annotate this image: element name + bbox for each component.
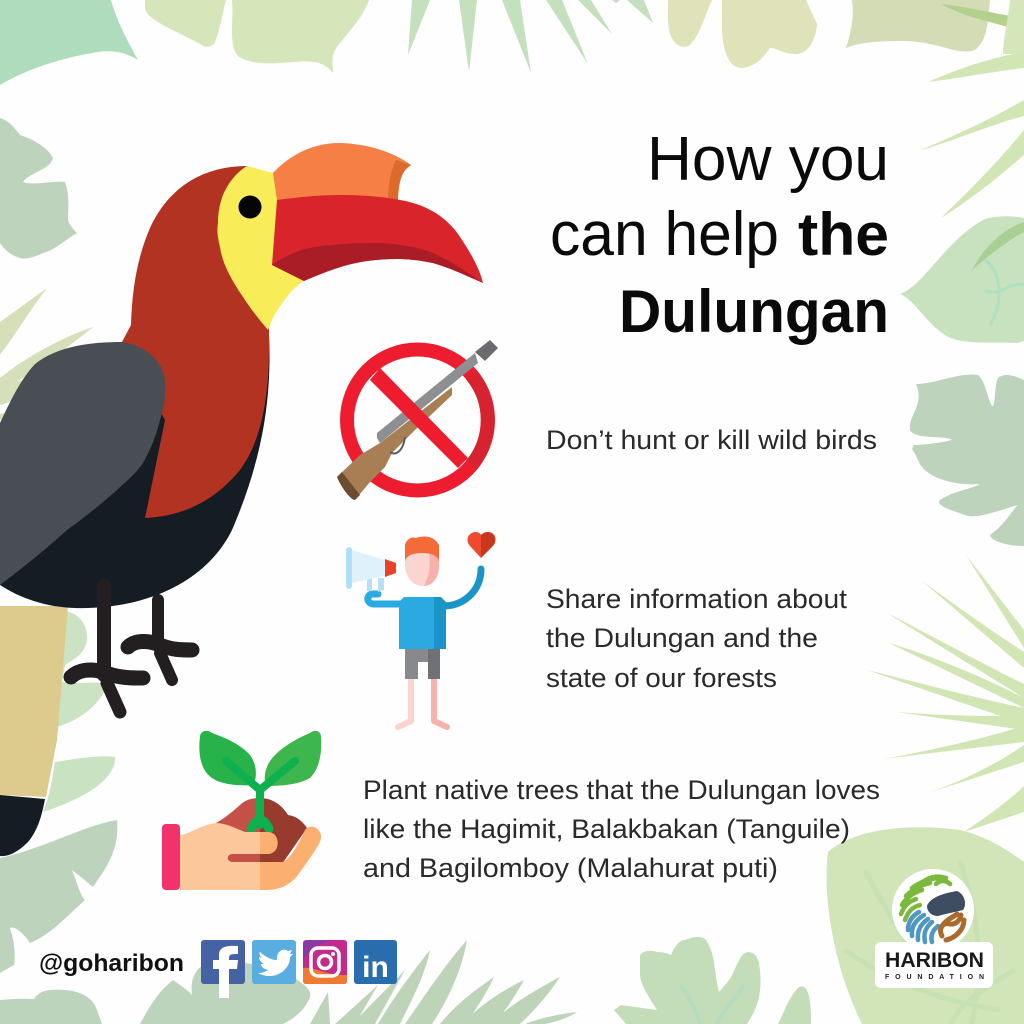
icon: linkedin (354, 940, 397, 984)
logo: Haribon Foundation (875, 869, 993, 988)
foliage: bottom right leaf (827, 827, 1024, 1024)
foliage: bottom border (0, 937, 811, 1024)
icon: instagram (303, 940, 347, 984)
icon: person with megaphone and heart (346, 532, 495, 727)
icon: twitter (252, 940, 296, 984)
yellow face (217, 166, 304, 330)
legs and claws (71, 586, 192, 712)
shorts (405, 649, 440, 679)
megaphone (346, 547, 396, 592)
belly (0, 335, 270, 608)
foliage: top border (0, 0, 1024, 85)
text: share information: Share information about (546, 584, 848, 614)
legs (398, 679, 447, 727)
text: share information (546, 584, 848, 693)
red neck and breast (122, 166, 269, 518)
grey wing (0, 342, 165, 585)
text: don't hunt: Don’t hunt or kill wild birds (546, 425, 877, 455)
tail (0, 606, 68, 856)
eye (238, 196, 262, 218)
icon: no hunting rifle (337, 340, 498, 500)
beak (272, 195, 483, 283)
hand (162, 823, 321, 890)
social handle: @goharibon (39, 950, 184, 977)
logo wordmark: HARIBON (885, 949, 984, 972)
icon: hand holding a seedling (162, 731, 321, 890)
heart (468, 532, 495, 558)
title: How you (647, 125, 889, 194)
text: plant native trees: Plant native trees that the Dulungan loves (363, 775, 880, 805)
text: share information: state of our forests (546, 663, 777, 693)
foliage: left border (0, 118, 117, 973)
text: plant native trees: like the Hagimit, Balakbakan (Tanguile) (363, 814, 850, 844)
head (405, 536, 439, 586)
social icons (201, 940, 397, 998)
bird: Dulungan hornbill (0, 143, 483, 856)
logo subtitle: FOUNDATION (885, 974, 984, 981)
logo mark (901, 877, 964, 942)
lower beak (272, 243, 483, 283)
shirt (399, 597, 446, 649)
arms (368, 569, 481, 606)
text: plant native trees (363, 775, 880, 883)
icon: linkedin: in (362, 951, 389, 984)
casque (273, 143, 411, 200)
title: Dulungan (619, 278, 889, 345)
leaves (199, 731, 321, 829)
title (550, 125, 889, 345)
text: share information: the Dulungan and the (546, 623, 818, 653)
text: plant native trees: and Bagilomboy (Malahurat puti) (363, 853, 778, 883)
title: the (798, 201, 889, 268)
foliage: right border (867, 52, 1024, 832)
icon: facebook (201, 940, 245, 998)
title: can help (550, 200, 779, 269)
soil (216, 798, 307, 864)
